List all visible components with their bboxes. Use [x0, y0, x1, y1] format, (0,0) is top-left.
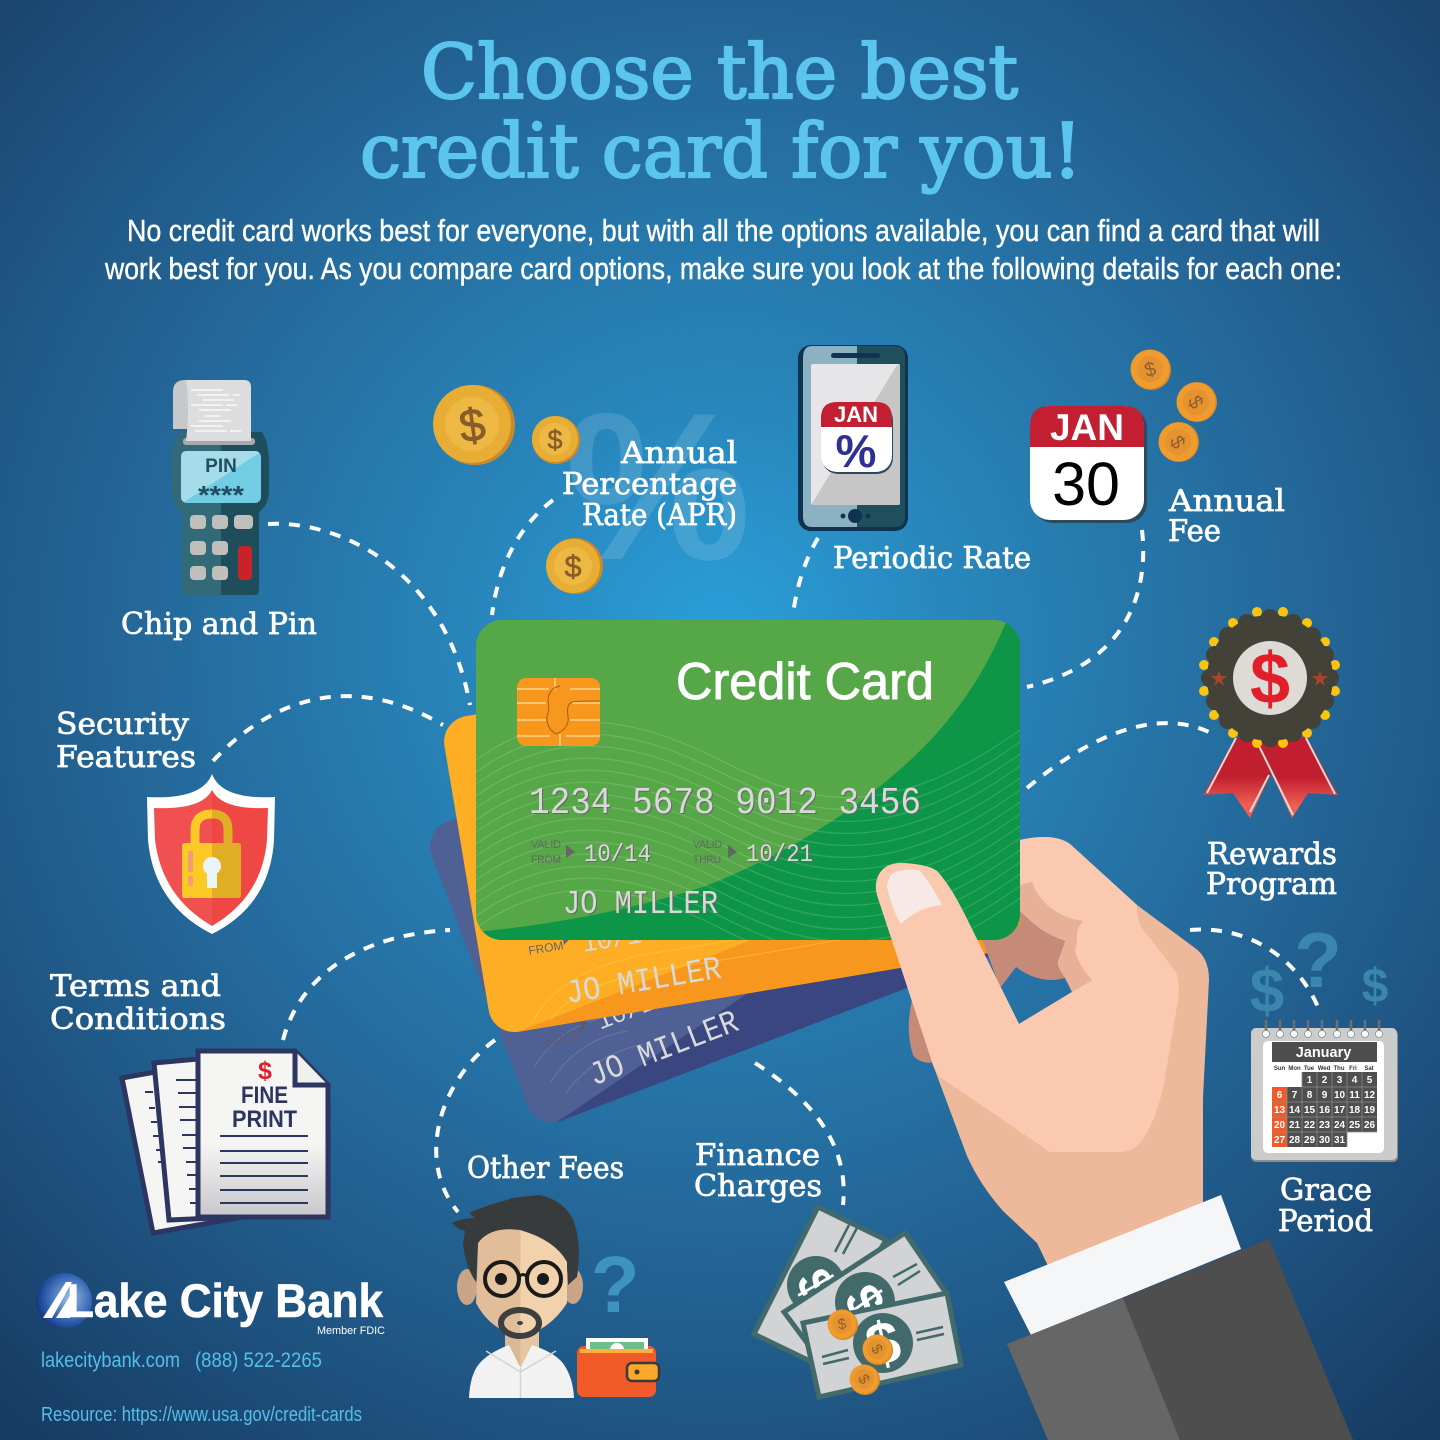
icon: fine print documents — [122, 1051, 328, 1233]
icon: grace period calendar: $ — [1362, 960, 1389, 1013]
green credit card: THRU — [693, 854, 721, 866]
icon: grace period calendar: 22 — [1304, 1120, 1315, 1131]
contact details — [41, 1349, 322, 1372]
label: periodic rate: Periodic Rate — [833, 541, 1031, 576]
hand: thumbnail — [887, 870, 942, 924]
logo: Lake City Bank: Lake City Bank — [67, 1274, 384, 1327]
orange credit card — [440, 631, 1030, 1036]
icon: confused man with wallet: ? — [591, 1240, 639, 1329]
label: annual percentage rate: Percentage — [562, 467, 737, 502]
dashed connectors — [213, 500, 1320, 1212]
hand: fingers behind card — [977, 911, 1065, 988]
green credit card: 10/14 — [584, 840, 651, 869]
coin group: APR: $ — [547, 425, 563, 455]
icon: grace period calendar: 13 — [1274, 1105, 1285, 1116]
icon: grace period calendar: 7 — [1292, 1090, 1298, 1101]
icon: grace period calendar — [1250, 916, 1398, 1162]
icon: grace period calendar: 17 — [1334, 1105, 1345, 1116]
label: rewards program: Program — [1206, 867, 1337, 902]
green credit card: 1234 5678 9012 3456 — [529, 782, 921, 825]
orange credit card: FROM — [527, 938, 564, 958]
icon: grace period calendar: Thu — [1334, 1066, 1345, 1072]
green credit card: JO MILLER — [563, 886, 718, 923]
green credit card — [476, 620, 1020, 966]
green credit card: VALID — [531, 839, 561, 851]
icon: grace period calendar: 25 — [1349, 1120, 1360, 1131]
hand: thumb and fingers — [876, 837, 1179, 1152]
blue credit card: FROM — [545, 1024, 586, 1052]
icon: grace period calendar: 23 — [1319, 1120, 1330, 1131]
label: grace period — [1278, 1173, 1373, 1239]
icon: grace period calendar: January — [1296, 1045, 1351, 1061]
icon: grace period calendar: 3 — [1337, 1075, 1343, 1086]
contact details: (888) 522-2265 — [195, 1349, 322, 1372]
icon: money bills and coins: $ — [854, 1371, 873, 1388]
coin group: APR: $ — [456, 397, 488, 453]
icon: grace period calendar: 8 — [1307, 1090, 1313, 1101]
blue credit card: JO MILLER — [584, 1004, 744, 1095]
icon: grace period calendar: Tue — [1304, 1066, 1315, 1072]
icon: grace period calendar: 1 — [1307, 1075, 1313, 1086]
label: terms and conditions: Conditions — [50, 1002, 226, 1037]
icon: rewards ribbon: $ — [1250, 639, 1290, 719]
label: finance charges: Finance — [695, 1138, 820, 1173]
coin group: APR — [433, 385, 603, 594]
label: grace period: Period — [1278, 1204, 1373, 1239]
hand: lower finger shadow — [909, 1000, 937, 1063]
icon: grace period calendar: Wed — [1318, 1066, 1331, 1072]
icon: money bills and coins — [754, 1207, 961, 1397]
icon: calendar with coins: $ — [1142, 358, 1158, 382]
label: annual fee — [1168, 484, 1285, 549]
icon: smartphone — [798, 345, 908, 531]
chip — [517, 678, 600, 746]
label: security features: Features — [56, 740, 196, 775]
icon: grace period calendar: 27 — [1274, 1135, 1285, 1146]
title — [360, 28, 1082, 195]
icon: grace period calendar: 15 — [1304, 1105, 1315, 1116]
icon: card terminal: PIN — [205, 456, 237, 477]
icon: calendar with coins — [1030, 350, 1217, 523]
green credit card: VALID — [693, 839, 722, 851]
icon: grace period calendar: 2 — [1322, 1075, 1328, 1086]
label: security features: Security — [56, 707, 189, 742]
label: annual percentage rate: Rate (APR) — [582, 498, 737, 533]
jacket sleeve — [1007, 1239, 1353, 1440]
icon: money bills and coins: $ — [785, 1259, 847, 1311]
green credit card: 10/21 — [746, 840, 813, 869]
icon: grace period calendar: 6 — [1277, 1090, 1283, 1101]
icon: grace period calendar: 11 — [1349, 1090, 1360, 1101]
watermark: percent sign: % — [565, 369, 751, 604]
icon: grace period calendar: 28 — [1289, 1135, 1300, 1146]
icon: card terminal — [172, 380, 269, 595]
icon: confused man with wallet — [452, 1195, 659, 1398]
green credit card: FROM — [531, 854, 561, 866]
label: rewards program: Rewards — [1207, 837, 1337, 872]
label: annual percentage rate — [562, 436, 737, 533]
icon: fine print documents: FINE — [241, 1082, 288, 1109]
icon: card terminal: **** — [198, 480, 245, 510]
hand: knuckle shading — [1020, 882, 1092, 992]
label: rewards program — [1206, 837, 1337, 902]
icon: calendar with coins: $ — [1183, 392, 1207, 413]
icon: grace period calendar: 19 — [1364, 1105, 1375, 1116]
label: annual fee: Fee — [1168, 514, 1221, 549]
label: grace period: Grace — [1280, 1173, 1372, 1208]
icon: grace period calendar: 5 — [1367, 1075, 1373, 1086]
icon: grace period calendar: Sat — [1364, 1066, 1374, 1072]
icon: grace period calendar: Sun — [1274, 1066, 1285, 1072]
icon: grace period calendar: Mon — [1288, 1066, 1301, 1072]
icon: grace period calendar: $ — [1250, 957, 1284, 1026]
icon: grace period calendar: Fri — [1349, 1066, 1357, 1072]
title: Choose the best — [421, 28, 1018, 116]
icon: grace period calendar: 9 — [1322, 1090, 1328, 1101]
label: annual fee: Annual — [1168, 484, 1285, 519]
icon: fine print documents: PRINT — [232, 1106, 297, 1133]
icon: grace period calendar: 18 — [1349, 1105, 1360, 1116]
icon: grace period calendar: 20 — [1274, 1120, 1285, 1131]
icon: grace period calendar: ? — [1294, 916, 1342, 1004]
label: terms and conditions: Terms and — [50, 969, 221, 1004]
icon: grace period calendar: 4 — [1352, 1075, 1358, 1086]
icon: calendar with coins: JAN — [1050, 407, 1124, 448]
icon: grace period calendar: 29 — [1304, 1135, 1315, 1146]
icon: money bills and coins: $ — [860, 1307, 906, 1380]
icon: money bills and coins: $ — [867, 1341, 886, 1358]
label: chip and pin: Chip and Pin — [121, 607, 317, 642]
icon: grace period calendar: 16 — [1319, 1105, 1330, 1116]
icon: calendar with coins: $ — [1165, 432, 1189, 453]
orange credit card: JO MILLER — [563, 951, 724, 1013]
icon: smartphone: % — [836, 425, 876, 477]
icon: grace period calendar: 10 — [1334, 1090, 1345, 1101]
icon: grace period calendar: 12 — [1364, 1090, 1375, 1101]
green credit card: Credit Card — [676, 653, 934, 711]
icon: grace period calendar: 30 — [1319, 1135, 1330, 1146]
icon: grace period calendar: 14 — [1289, 1105, 1300, 1116]
hand: palm and wrist — [876, 837, 1209, 1270]
icon: smartphone: JAN — [834, 402, 878, 427]
label: security features — [56, 707, 196, 775]
logo: Lake City Bank: Member FDIC — [317, 1325, 385, 1337]
icon: grace period calendar: 31 — [1334, 1135, 1345, 1146]
title: credit card for you! — [360, 107, 1082, 195]
icon: calendar with coins: 30 — [1052, 450, 1120, 518]
icon: money bills and coins: $ — [837, 1315, 848, 1334]
icon: grace period calendar: 24 — [1334, 1120, 1345, 1131]
icon: fine print documents: $ — [258, 1057, 272, 1085]
blue credit card: 10/14 — [593, 983, 673, 1037]
orange credit card: 10/14 — [580, 919, 659, 960]
label: finance charges — [694, 1138, 822, 1204]
icon: grace period calendar: 26 — [1364, 1120, 1375, 1131]
jacket cuff — [1004, 1195, 1241, 1335]
contact details: lakecitybank.com — [41, 1349, 180, 1372]
resource link: Resource: https://www.usa.gov/credit-cards — [41, 1404, 362, 1426]
label: finance charges: Charges — [694, 1169, 822, 1204]
label: terms and conditions — [50, 969, 226, 1037]
icon: money bills and coins: $ — [832, 1274, 896, 1331]
intro paragraph — [104, 213, 1342, 286]
icon: grace period calendar: 21 — [1289, 1120, 1300, 1131]
blue credit card — [422, 636, 1045, 1130]
label: annual percentage rate: Annual — [620, 436, 737, 471]
coin group: APR: $ — [564, 549, 582, 584]
label: other fees: Other Fees — [467, 1151, 624, 1186]
icon: shield with padlock — [147, 774, 275, 934]
icon: rewards ribbon — [1199, 607, 1340, 818]
